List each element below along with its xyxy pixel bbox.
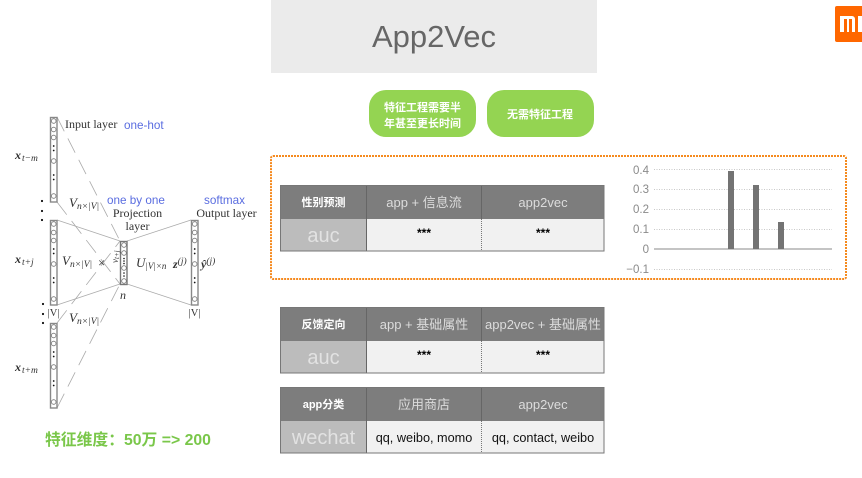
input column bottom bbox=[50, 324, 57, 408]
math labels: t−m bbox=[22, 154, 38, 164]
axis ticks: 0.3 bbox=[633, 184, 649, 196]
icon: orange logo bbox=[835, 6, 862, 42]
math labels: (j) bbox=[206, 256, 215, 267]
table: feedback targeting bbox=[280, 307, 604, 373]
title banner bbox=[271, 0, 597, 73]
table: app classification: qq, weibo, momo bbox=[376, 431, 472, 445]
axis ticks: 0.1 bbox=[633, 224, 649, 236]
ellipsis dots bbox=[41, 200, 44, 324]
math labels: n×|V| bbox=[77, 202, 99, 212]
math labels: v bbox=[110, 259, 120, 263]
bars bbox=[728, 171, 784, 249]
layer labels: Projection bbox=[113, 206, 162, 220]
axis ticks bbox=[626, 165, 650, 276]
title banner: App2Vec bbox=[372, 19, 496, 54]
button: feature engineering takes long: 年甚至更长时间 bbox=[384, 116, 461, 130]
math labels: (j) bbox=[178, 256, 187, 267]
blue annotations bbox=[107, 119, 245, 207]
connecting lines bbox=[57, 117, 191, 408]
math labels: V bbox=[62, 253, 70, 268]
axis ticks: −0.1 bbox=[626, 264, 649, 276]
math labels: t+m bbox=[22, 366, 38, 376]
layer labels: Output layer bbox=[196, 206, 257, 220]
layer labels: Input layer bbox=[65, 117, 117, 131]
table: gender prediction: *** bbox=[536, 226, 550, 240]
input column middle bbox=[50, 220, 57, 305]
layer labels bbox=[65, 117, 257, 233]
table: feedback targeting: *** bbox=[417, 348, 431, 362]
projection column bbox=[120, 242, 127, 284]
math labels: |V| bbox=[189, 308, 200, 319]
axis ticks: 0.2 bbox=[633, 204, 649, 216]
table: feedback targeting: auc bbox=[307, 347, 340, 369]
button: feature engineering takes long: 特征工程需要半 bbox=[384, 100, 461, 114]
axis ticks: 0 bbox=[643, 244, 649, 256]
table: app classification bbox=[280, 387, 604, 453]
math labels: z bbox=[173, 257, 178, 271]
table: feedback targeting: app + 基础属性 bbox=[380, 317, 468, 332]
grid lines bbox=[654, 170, 832, 270]
table: app classification: app分类 bbox=[303, 397, 344, 411]
axis ticks: 0.4 bbox=[633, 165, 650, 177]
math labels: V bbox=[69, 310, 77, 325]
math labels: t+j bbox=[22, 258, 34, 268]
blue annotations: softmax bbox=[204, 194, 245, 207]
table: gender prediction bbox=[280, 185, 604, 251]
math labels: × bbox=[98, 255, 105, 270]
math labels: U bbox=[136, 255, 145, 270]
button: feature engineering takes long bbox=[369, 90, 476, 137]
table: app classification: qq, contact, weibo bbox=[492, 431, 594, 445]
math labels: x bbox=[15, 360, 21, 374]
math labels: t+j bbox=[113, 250, 121, 259]
table: gender prediction: auc bbox=[307, 225, 340, 247]
input column top bbox=[50, 118, 57, 202]
blue annotations: one-hot bbox=[124, 119, 164, 132]
dotted panel: gender prediction bbox=[271, 156, 846, 279]
table: feedback targeting: app2vec + 基础属性 bbox=[485, 317, 601, 332]
math labels: x bbox=[15, 252, 21, 266]
math labels: n×|V| bbox=[77, 317, 99, 327]
layer labels: layer bbox=[126, 219, 149, 233]
table: app classification: wechat bbox=[291, 427, 356, 449]
math labels: ŷ bbox=[201, 257, 206, 271]
table: app classification: 应用商店 bbox=[398, 397, 450, 412]
button: no feature engineering: 无需特征工程 bbox=[507, 107, 573, 121]
table: gender prediction: app + 信息流 bbox=[386, 195, 462, 210]
caption: feature dimension: 特征维度：50万 => 200 bbox=[45, 430, 211, 449]
table: gender prediction: app2vec bbox=[518, 195, 568, 210]
network diagram bbox=[14, 117, 257, 408]
table: gender prediction: *** bbox=[417, 226, 431, 240]
math labels: x bbox=[15, 148, 21, 162]
math labels: V bbox=[69, 195, 77, 210]
table: feedback targeting: *** bbox=[536, 348, 550, 362]
math labels: |V|×n bbox=[145, 261, 167, 271]
math labels: |V| bbox=[48, 308, 59, 319]
math labels: n×|V| bbox=[70, 260, 92, 270]
math labels bbox=[14, 148, 215, 376]
blue annotations: one by one bbox=[107, 194, 165, 207]
button: no feature engineering bbox=[487, 90, 594, 137]
math labels: n bbox=[120, 288, 126, 302]
output column bbox=[192, 220, 198, 305]
table: gender prediction: 性别预测 bbox=[302, 195, 346, 209]
bar chart bbox=[626, 165, 832, 276]
table: app classification: app2vec bbox=[518, 397, 568, 412]
table: feedback targeting: 反馈定向 bbox=[302, 317, 346, 331]
